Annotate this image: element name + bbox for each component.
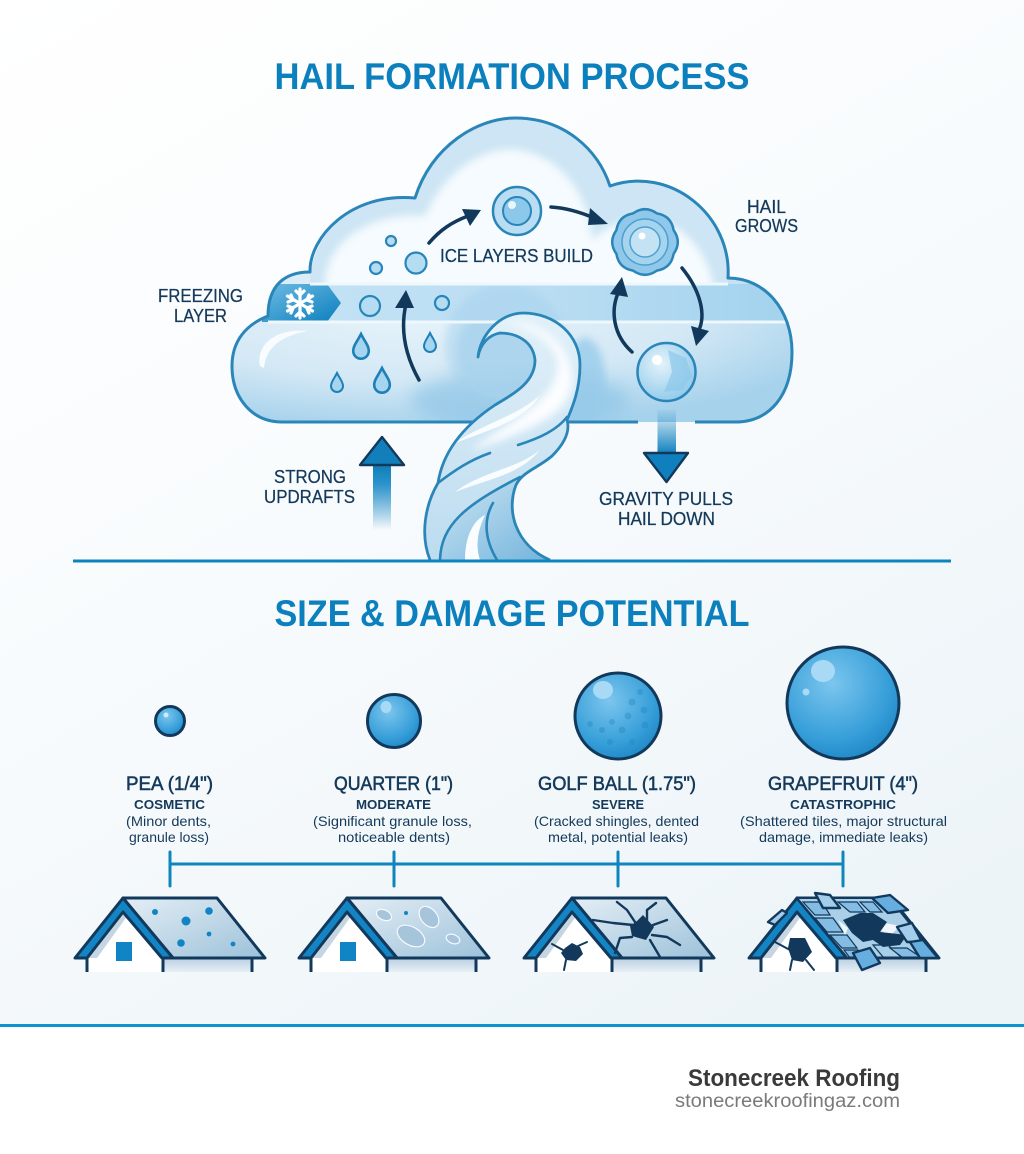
cloud upper lobes bbox=[310, 118, 728, 284]
footer panel bbox=[0, 1024, 1024, 1154]
heading: size and damage potential: SIZE & DAMAGE POTENTIAL bbox=[274, 593, 750, 634]
label: golf ball: GOLF BALL (1.75") bbox=[538, 774, 696, 795]
funnel outline bbox=[425, 313, 580, 560]
arrow: gravity pull bbox=[644, 410, 688, 482]
roof outline bbox=[848, 898, 938, 958]
freezing layer badge bbox=[262, 284, 341, 322]
wall hole bbox=[561, 943, 583, 961]
swirl shading bbox=[406, 324, 632, 420]
label: hail grows bbox=[735, 197, 798, 236]
label: gravity pulls hail down bbox=[599, 489, 733, 529]
label: strong updrafts bbox=[264, 467, 355, 507]
label: ice layers build: ICE LAYERS BUILD bbox=[440, 246, 593, 266]
label: strong updrafts: UPDRAFTS bbox=[264, 487, 355, 507]
funnel white sweep bbox=[470, 322, 572, 452]
exposed shards bbox=[838, 920, 900, 936]
label: quarter: MODERATE bbox=[356, 797, 431, 812]
label: quarter: QUARTER (1") bbox=[334, 774, 453, 795]
label: quarter: noticeable dents) bbox=[338, 829, 450, 845]
funnel stream lines bbox=[438, 417, 567, 560]
roof 2: quarter damage bbox=[299, 898, 489, 972]
label: pea: granule loss) bbox=[129, 829, 209, 845]
timeline connector bbox=[170, 852, 843, 886]
label: strong updrafts: STRONG bbox=[274, 467, 346, 487]
brand name: Stonecreek Roofing bbox=[688, 1065, 900, 1092]
dot bbox=[404, 911, 408, 915]
freezing layer band bbox=[328, 284, 784, 378]
small hail pellets bbox=[360, 236, 449, 316]
crack lines bbox=[593, 902, 680, 957]
label: gravity pulls hail down: HAIL DOWN bbox=[618, 509, 715, 529]
label: pea: (Minor dents, bbox=[126, 813, 211, 829]
wall hole bbox=[788, 938, 812, 962]
label: grapefruit: damage, immediate leaks) bbox=[759, 829, 928, 845]
shingle grid bbox=[803, 902, 922, 958]
label: grapefruit: CATASTROPHIC bbox=[790, 797, 897, 812]
hail size: quarter bbox=[368, 694, 420, 748]
funnel highlights bbox=[455, 395, 540, 560]
loose shingles bbox=[768, 893, 938, 970]
window bbox=[116, 942, 132, 961]
roof tile tint bbox=[799, 899, 938, 957]
roof 4: grapefruit damage bbox=[749, 893, 939, 972]
label: freezing layer bbox=[158, 286, 243, 326]
cloud gloss bbox=[259, 331, 308, 368]
label: freezing layer: FREEZING bbox=[158, 286, 243, 306]
label: pea bbox=[126, 774, 213, 845]
arrow: strong updrafts bbox=[360, 437, 404, 530]
label: hail grows: HAIL bbox=[747, 197, 786, 217]
label: pea: COSMETIC bbox=[134, 797, 206, 812]
cloud labels bbox=[158, 197, 798, 529]
section divider bbox=[73, 560, 951, 562]
label: golf ball: metal, potential leaks) bbox=[548, 829, 688, 845]
brand url: stonecreekroofingaz.com bbox=[675, 1091, 900, 1112]
label: pea: PEA (1/4") bbox=[126, 774, 213, 795]
cloud lower body and band silhouette bbox=[232, 272, 792, 422]
layered hail ball bbox=[493, 187, 541, 235]
granule loss dots bbox=[152, 907, 235, 947]
label: grapefruit bbox=[740, 774, 947, 845]
layer divider bbox=[268, 284, 790, 322]
tornado funnel bbox=[425, 313, 580, 560]
label: golf ball: SEVERE bbox=[592, 797, 644, 812]
title: hail formation process: HAIL FORMATION PROCESS bbox=[274, 56, 750, 97]
wall crack lines bbox=[552, 942, 587, 970]
roof 3: golf ball damage bbox=[524, 898, 714, 972]
icon: snowflake bbox=[288, 289, 312, 318]
hail size: grapefruit bbox=[787, 647, 899, 759]
roof 1: pea damage bbox=[75, 898, 265, 972]
label: quarter bbox=[313, 774, 472, 845]
wall cracks bbox=[775, 942, 814, 970]
cloud inner highlight bbox=[325, 149, 714, 290]
window bbox=[340, 942, 356, 961]
funnel lower fan bbox=[441, 477, 550, 560]
label: grapefruit: (Shattered tiles, major structural bbox=[740, 813, 947, 829]
label: grapefruit: GRAPEFRUIT (4") bbox=[768, 774, 918, 795]
label: golf ball bbox=[534, 774, 699, 845]
roof crack bbox=[630, 915, 654, 940]
hail size: golf ball bbox=[575, 673, 661, 759]
dents bbox=[375, 903, 461, 951]
size labels bbox=[126, 774, 947, 845]
label: freezing layer: LAYER bbox=[174, 306, 227, 326]
footer background bbox=[0, 1026, 1024, 1154]
roof hole bbox=[843, 913, 907, 947]
label: quarter: (Significant granule loss, bbox=[313, 813, 472, 829]
growing hail stone bbox=[612, 209, 678, 275]
cloud outline bbox=[232, 118, 792, 422]
label: golf ball: (Cracked shingles, dented bbox=[534, 813, 699, 829]
label: hail grows: GROWS bbox=[735, 216, 798, 236]
footer rule bbox=[0, 1024, 1024, 1027]
storm cloud bbox=[232, 118, 797, 430]
hail size: pea bbox=[156, 706, 184, 736]
process arrows bbox=[395, 207, 709, 380]
water drops bbox=[331, 333, 436, 393]
label: gravity pulls hail down: GRAVITY PULLS bbox=[599, 489, 733, 509]
funnel body bbox=[425, 313, 580, 560]
large hail ball bbox=[638, 343, 696, 401]
